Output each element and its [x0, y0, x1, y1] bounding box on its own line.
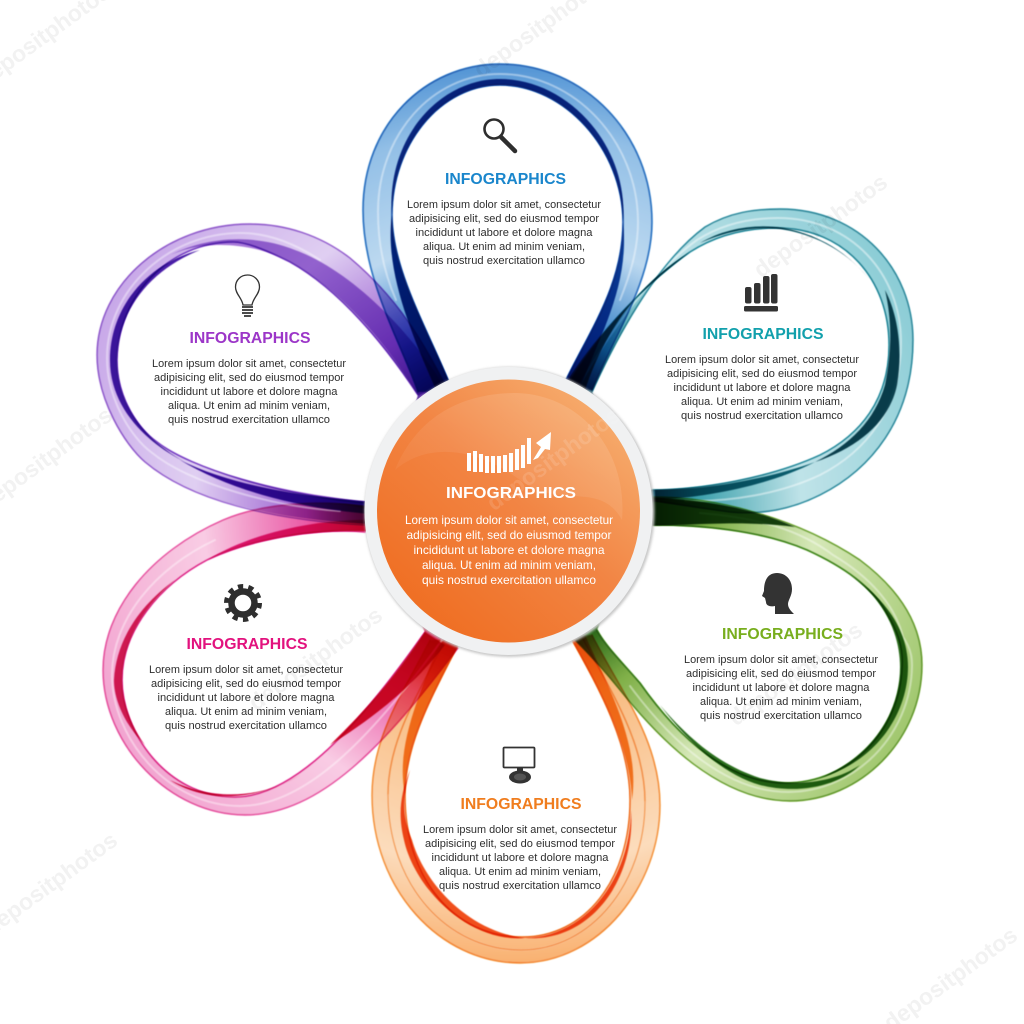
text: blue panel: INFOGRAPHICS	[445, 171, 566, 188]
text: orange panel: INFOGRAPHICS	[460, 796, 582, 813]
text: green panel: INFOGRAPHICS	[722, 626, 843, 643]
icon: head	[762, 573, 794, 614]
petal: purple	[97, 224, 447, 525]
text: orange panel: quis nostrud exercitation ullamco	[439, 880, 601, 892]
text: teal panel: incididunt ut labore et dolore magna	[674, 382, 851, 394]
text: blue panel	[407, 171, 601, 267]
text: blue panel: Lorem ipsum dolor sit amet, consectetur	[407, 199, 601, 211]
text: pink panel: Lorem ipsum dolor sit amet, consectetur	[149, 664, 343, 676]
text: green panel: quis nostrud exercitation ullamco	[700, 710, 862, 722]
petal: blue	[363, 64, 652, 392]
watermark: depositphotos	[244, 601, 387, 716]
text: teal panel: aliqua. Ut enim ad minim veniam,	[681, 396, 843, 408]
text: purple panel: incididunt ut labore et dolore magna	[160, 386, 338, 398]
center circle	[364, 367, 654, 657]
petal: pink	[103, 503, 458, 815]
text: green panel	[684, 626, 878, 722]
text: blue panel: quis nostrud exercitation ullamco	[423, 255, 585, 267]
text: purple panel: Lorem ipsum dolor sit amet, consectetur	[152, 358, 346, 370]
text: orange panel: adipisicing elit, sed do eiusmod tempor	[425, 838, 615, 850]
center text: INFOGRAPHICS	[446, 485, 576, 502]
text: green panel: adipisicing elit, sed do eiusmod tempor	[686, 668, 876, 680]
icon: center growth chart	[467, 432, 551, 473]
text: pink panel: adipisicing elit, sed do eiusmod tempor	[151, 678, 341, 690]
text: pink panel	[149, 636, 343, 732]
text: teal panel: adipisicing elit, sed do eiusmod tempor	[667, 368, 857, 380]
center text: incididunt ut labore et dolore magna	[414, 543, 605, 557]
text: blue panel: adipisicing elit, sed do eiusmod tempor	[409, 213, 599, 225]
watermark: depositphotos	[749, 168, 892, 283]
text: green panel: incididunt ut labore et dolore magna	[692, 682, 870, 694]
petal: orange	[372, 635, 660, 963]
text: teal panel: quis nostrud exercitation ullamco	[681, 410, 843, 422]
text: blue panel: incididunt ut labore et dolore magna	[416, 227, 593, 239]
center text: aliqua. Ut enim ad minim veniam,	[422, 558, 596, 572]
text: pink panel: incididunt ut labore et dolore magna	[158, 692, 335, 704]
text: purple panel	[152, 330, 346, 426]
text: teal panel: INFOGRAPHICS	[702, 326, 824, 343]
watermark: depositphotos	[724, 616, 867, 731]
text: pink panel: aliqua. Ut enim ad minim veniam,	[165, 706, 327, 718]
center text: Lorem ipsum dolor sit amet, consectetur	[405, 513, 613, 527]
icon: magnifier	[484, 120, 515, 151]
center watermark: depositphotos	[482, 401, 625, 516]
text: orange panel	[423, 796, 617, 892]
text: teal panel	[665, 326, 859, 422]
text: purple panel: adipisicing elit, sed do eiusmod tempor	[154, 372, 344, 384]
text: orange panel: Lorem ipsum dolor sit amet, consectetur	[423, 824, 617, 836]
text: purple panel: INFOGRAPHICS	[190, 330, 310, 347]
text: pink panel: quis nostrud exercitation ullamco	[165, 720, 327, 732]
center text: quis nostrud exercitation ullamco	[422, 573, 596, 587]
icon: gear	[226, 586, 260, 620]
text: blue panel: aliqua. Ut enim ad minim veniam,	[423, 241, 585, 253]
icon: bar chart	[744, 274, 778, 312]
text: purple panel: quis nostrud exercitation ullamco	[168, 414, 330, 426]
icon: monitor	[504, 748, 534, 784]
petal: green	[575, 497, 922, 801]
text: pink panel: INFOGRAPHICS	[186, 636, 308, 653]
center text	[405, 485, 613, 587]
text: orange panel: incididunt ut labore et dolore magna	[432, 852, 609, 864]
text: green panel: Lorem ipsum dolor sit amet, consectetur	[684, 654, 878, 666]
text: orange panel: aliqua. Ut enim ad minim veniam,	[439, 866, 601, 878]
center text: adipisicing elit, sed do eiusmod tempor	[406, 528, 612, 542]
text: green panel: aliqua. Ut enim ad minim veniam,	[700, 696, 862, 708]
text: purple panel: aliqua. Ut enim ad minim veniam,	[168, 400, 330, 412]
petal: teal	[565, 209, 913, 513]
icon: light bulb	[236, 275, 260, 316]
text: teal panel: Lorem ipsum dolor sit amet, consectetur	[665, 354, 859, 366]
